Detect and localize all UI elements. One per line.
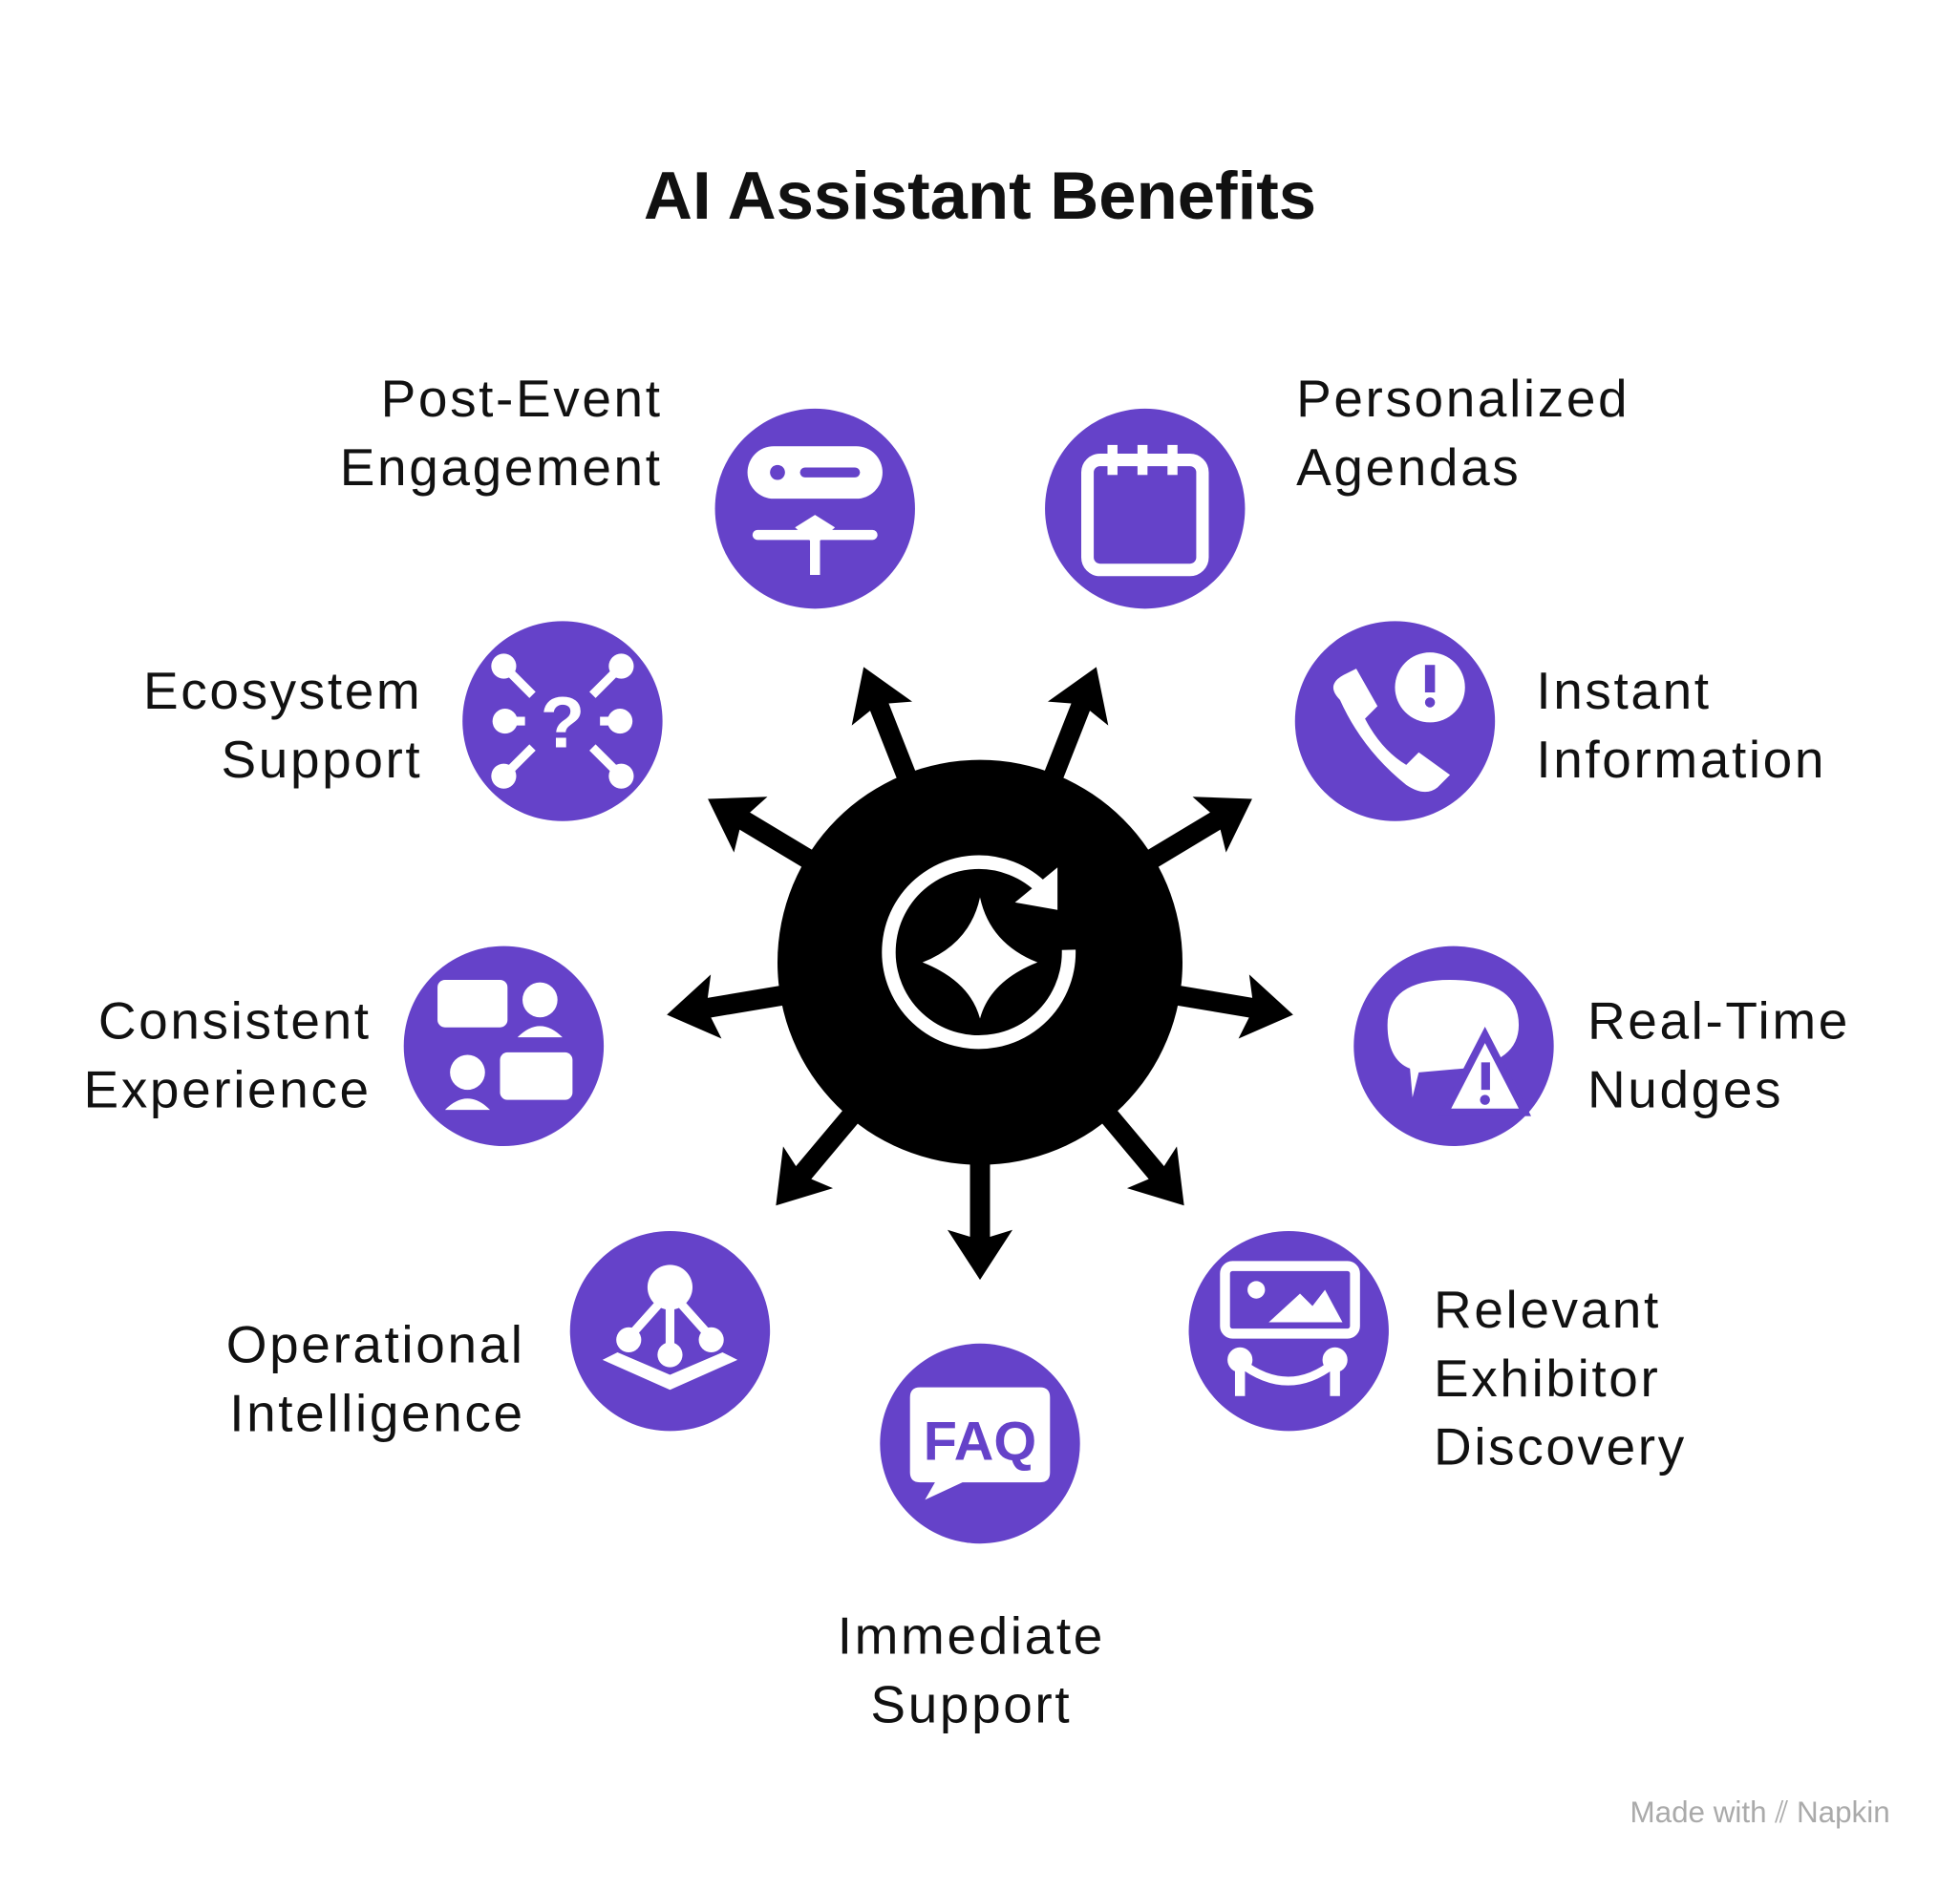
labels <box>84 369 1850 1733</box>
label: consistent: Consistent <box>98 990 372 1050</box>
label: instant: Information <box>1536 730 1826 789</box>
circle: real-time nudges <box>1353 946 1554 1146</box>
label: consistent: Experience <box>84 1059 372 1118</box>
label: post-event: Post-Event <box>381 369 663 428</box>
circle: ecosystem <box>462 621 663 821</box>
watermark: Made with ⫽ Napkin <box>1630 1795 1890 1829</box>
circle: consistent experience <box>404 946 604 1146</box>
label: ecosystem: Support <box>222 730 422 789</box>
circle: relevant exhibitor discovery <box>1189 1231 1389 1431</box>
circle: personalized agendas <box>1045 409 1245 608</box>
title: AI Assistant Benefits <box>644 158 1316 233</box>
circle: instant information <box>1295 621 1495 821</box>
circle: operational intelligence <box>570 1231 770 1431</box>
arrows <box>662 655 1298 1280</box>
center hub <box>778 760 1182 1165</box>
label: real-time: Real-Time <box>1587 990 1850 1050</box>
circle: immediate support <box>880 1344 1080 1543</box>
label: operational: Intelligence <box>229 1383 525 1442</box>
circle: immediate support: FAQ <box>924 1412 1036 1473</box>
label: post-event: Engagement <box>340 437 663 497</box>
label: relevant: Discovery <box>1434 1417 1687 1477</box>
label: ecosystem: Ecosystem <box>143 661 422 720</box>
circle: ecosystem: ? <box>541 683 585 764</box>
label: personalized agendas: Agendas <box>1296 437 1521 497</box>
label: immediate: Immediate <box>838 1605 1105 1665</box>
label: relevant: Exhibitor <box>1434 1349 1660 1408</box>
icon: AI refresh <box>888 862 1069 1042</box>
circle: post-event <box>715 409 915 608</box>
label: real-time: Nudges <box>1587 1059 1783 1118</box>
label: operational: Operational <box>226 1314 525 1373</box>
label: relevant: Relevant <box>1434 1280 1661 1339</box>
label: personalized agendas: Personalized <box>1296 369 1630 428</box>
label: immediate: Support <box>870 1674 1072 1733</box>
label: instant: Instant <box>1536 661 1712 720</box>
